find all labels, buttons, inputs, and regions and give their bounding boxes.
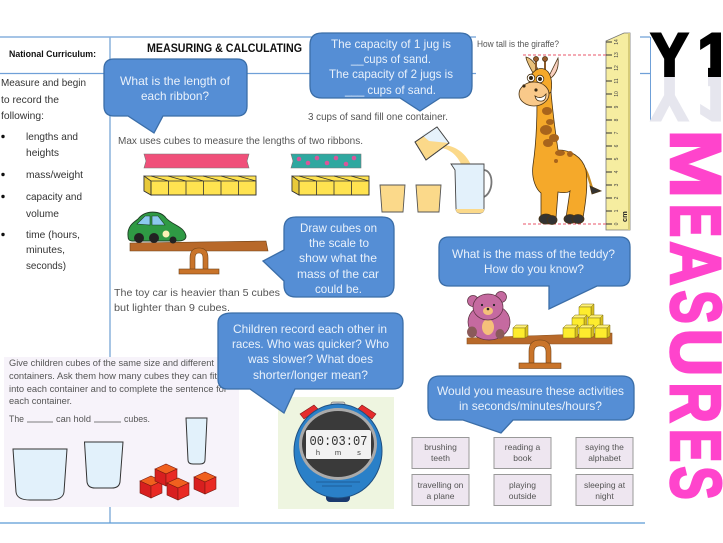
illustration: giraffe height ruler: 13 (614, 52, 620, 58)
illustration: pink ribbon and six cubes (144, 154, 256, 195)
callout: jug capacity: __cups of sand. (350, 52, 431, 66)
illustration: giraffe height ruler: 2 (614, 196, 620, 199)
text block: curriculum list: mass/weight (26, 169, 83, 181)
activity cards: book (513, 453, 532, 463)
activity cards: alphabet (588, 453, 621, 463)
callout: races (218, 313, 403, 413)
text: toy car statement: but lighter than 9 cubes. (114, 302, 230, 314)
text block: curriculum list: lengths and (26, 131, 78, 143)
activity cards: saying the (585, 442, 624, 452)
text block: curriculum list: to record the (1, 94, 59, 106)
illustration: giraffe height ruler: 14 (614, 39, 620, 45)
activity cards: sleeping at (584, 480, 626, 490)
illustration: giraffe height ruler: 0 (614, 222, 620, 225)
callout: activity duration: in seconds/minutes/hours? (459, 399, 602, 413)
activity cards: outside (509, 491, 536, 501)
illustration: giraffe height ruler: 12 (614, 65, 620, 71)
panel: stopwatch: 00:03:07 (310, 435, 368, 450)
activity cards: travelling on (418, 480, 464, 490)
illustration: giraffe height ruler: 6 (614, 144, 620, 147)
activity cards: reading a (505, 442, 540, 452)
icon: red cubes (140, 464, 216, 500)
callout: ribbon length (104, 59, 247, 133)
illustration: giraffe height ruler: 5 (614, 157, 620, 160)
illustration: giraffe height ruler: 9 (614, 105, 620, 108)
panel: stopwatch: h (316, 448, 320, 457)
panel: containers activity: cubes. (124, 414, 150, 424)
callout: teddy mass (439, 237, 630, 309)
year label: Y1: Y (651, 22, 688, 88)
illustration: toy car on balance scale (128, 212, 268, 274)
text block: curriculum list: time (hours, (26, 229, 80, 241)
year label reflection: Y (651, 66, 688, 132)
illustration: giraffe height ruler: 7 (614, 131, 620, 134)
activity cards: playing (509, 480, 536, 490)
callout: draw cubes: the scale to (309, 236, 369, 250)
panel: stopwatch: m (335, 448, 341, 457)
callout: draw cubes: show what the (299, 251, 377, 265)
callout: ribbon length: What is the length of (120, 74, 231, 88)
callout: jug capacity (310, 33, 472, 111)
panel: containers activity: into each container and to complete the sentence for (9, 384, 227, 394)
illustration: teddy on balance scale (467, 292, 612, 368)
callout: teddy mass: What is the mass of the teddy? (452, 247, 615, 261)
callout: draw cubes: mass of the car (297, 267, 379, 281)
text: toy car statement (114, 287, 280, 314)
illustration: giraffe (519, 56, 601, 224)
text: ribbons caption: Max uses cubes to measure the lengths of two ribbons. (118, 136, 363, 147)
callout: jug capacity: The capacity of 1 jug is (331, 37, 451, 51)
callout: races: races. Who was quicker? Who (232, 337, 389, 351)
activity cards: night (595, 491, 614, 501)
text: sand caption: 3 cups of sand fill one container. (308, 112, 448, 123)
year label reflection (650, 77, 721, 122)
text block: curriculum list (1, 77, 86, 272)
text block: curriculum list: following: (1, 110, 44, 122)
illustration: giraffe height ruler: 8 (614, 118, 620, 121)
callout: ribbon length: each ribbon? (141, 89, 209, 103)
illustration: giraffe height ruler: 3 (614, 183, 620, 186)
icon: wide glass (13, 449, 67, 500)
activity cards (412, 438, 633, 506)
callout: draw cubes: could be. (315, 282, 362, 296)
illustration: giraffe height ruler (523, 33, 630, 230)
activity cards: a plane (427, 491, 455, 501)
text block: curriculum list: minutes, (26, 244, 65, 256)
icon: tall glass (186, 418, 207, 464)
illustration: giraffe height ruler: cm (620, 211, 629, 222)
text block: curriculum list: Measure and begin (1, 77, 86, 89)
callout: races: shorter/longer mean? (253, 368, 368, 382)
icon: medium glass (84, 442, 123, 488)
heading: National Curriculum: National Curriculum: (9, 49, 96, 60)
panel: containers activity: The (9, 414, 24, 424)
panel: stopwatch: s (357, 448, 361, 457)
callout: draw cubes (263, 217, 394, 297)
panel: containers activity: Give children cubes of the same size and different (9, 358, 215, 368)
callout: activity duration (428, 376, 634, 433)
callout: teddy mass: How do you know? (484, 262, 584, 276)
callout: jug capacity: ___ cups of sand. (344, 83, 436, 97)
illustration: giraffe height ruler: 4 (614, 170, 620, 173)
text: toy car statement: The toy car is heavier than 5 cubes (114, 287, 280, 299)
callout: races: Children record each other in (233, 322, 387, 336)
activity cards: brushing (424, 442, 457, 452)
text block: curriculum list: heights (26, 147, 59, 159)
illustration: giraffe height ruler: 10 (614, 91, 620, 97)
panel: containers activity (4, 357, 239, 507)
panel: stopwatch (278, 397, 394, 509)
panel: containers activity: can hold (56, 414, 91, 424)
illustration: pouring cup and jug with two cups (380, 127, 492, 213)
text block: curriculum list: volume (26, 208, 59, 220)
text: giraffe question: How tall is the giraffe? (477, 39, 559, 49)
illustration: giraffe height ruler: 1 (614, 209, 620, 212)
title: Measuring and Calculating: MEASURING & CALCULATING (147, 43, 302, 55)
activity cards: teeth (431, 453, 450, 463)
illustration: teal ribbon and four cubes (291, 154, 369, 195)
panel: containers activity: containers. Ask them how many cubes they can fit (9, 371, 218, 381)
callout: jug capacity: The capacity of 2 jugs is (329, 67, 453, 81)
panel: containers activity: each container. (9, 396, 72, 406)
text block: curriculum list: capacity and (26, 191, 82, 203)
callout: activity duration: Would you measure these activities (437, 384, 624, 398)
callout: draw cubes: Draw cubes on (300, 221, 377, 235)
callout: races: was slower? What does (247, 352, 373, 366)
text block: curriculum list: seconds) (26, 260, 66, 272)
illustration: giraffe height ruler: 11 (614, 78, 620, 84)
